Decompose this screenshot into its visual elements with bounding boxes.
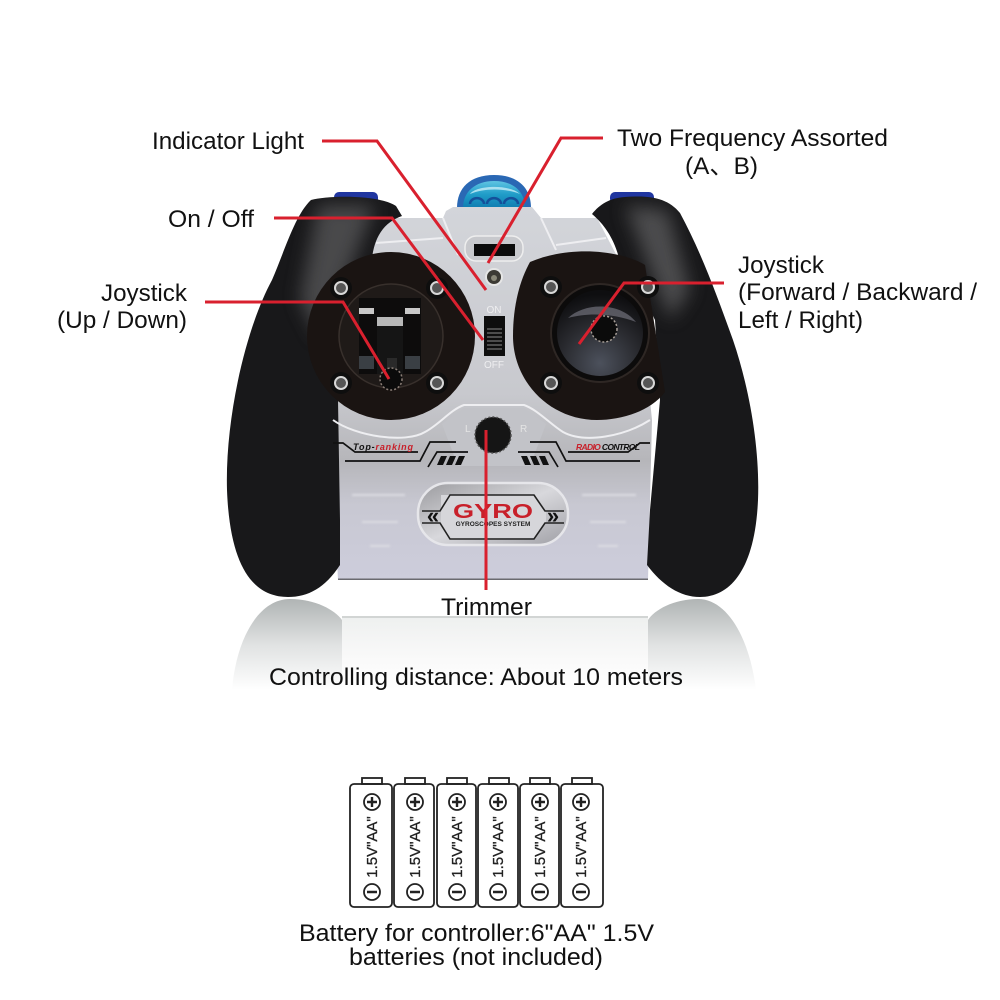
- battery 5: [520, 778, 559, 907]
- label: trimmer: Trimmer: [441, 594, 532, 621]
- left decal: [333, 442, 468, 467]
- battery 2: [394, 778, 434, 907]
- label: left/right: Left / Right): [738, 307, 863, 334]
- antenna light: [457, 175, 531, 208]
- silver panel highlights: [333, 218, 650, 470]
- caption: battery line 2: batteries (not included): [349, 944, 603, 971]
- battery 1: [350, 778, 392, 907]
- left decal: Top-ranking: [353, 442, 414, 452]
- joystick plate screws: [330, 276, 659, 394]
- trimmer panel: L: [465, 424, 471, 435]
- label: up/down: (Up / Down): [57, 307, 187, 334]
- label: indicator light: Indicator Light: [152, 128, 304, 155]
- GYRO badge: «: [427, 503, 439, 528]
- trimmer panel: R: [520, 424, 527, 435]
- left joystick knob: [380, 358, 402, 390]
- leader line: two frequency: [488, 138, 603, 263]
- power switch: [484, 305, 505, 371]
- battery 1: 1.5V"AA": [364, 816, 381, 878]
- indicator LED: [485, 268, 503, 286]
- battery 6: [561, 778, 603, 907]
- right joystick plate: [513, 251, 665, 420]
- trimmer panel: [442, 408, 546, 466]
- battery 2: 1.5V"AA": [407, 816, 424, 878]
- body grooves: [352, 495, 636, 546]
- GYRO badge: [418, 483, 568, 545]
- leader line: trimmer: [484, 430, 488, 590]
- battery 6: 1.5V"AA": [573, 816, 590, 878]
- label: on/off: On / Off: [168, 206, 254, 233]
- GYRO badge: GYRO: [453, 501, 533, 523]
- battery 4: [478, 778, 518, 907]
- remote controller: [220, 175, 765, 600]
- reflection under controller: [232, 599, 756, 690]
- left joystick plate: [307, 252, 475, 420]
- frequency selector: [465, 236, 523, 261]
- label: left joystick: Joystick: [101, 280, 188, 307]
- grip buttons: [334, 192, 654, 204]
- battery 5: 1.5V"AA": [532, 816, 549, 878]
- label: controlling distance: Controlling distance: About 10 meters: [269, 664, 683, 691]
- battery 3: 1.5V"AA": [449, 816, 466, 878]
- leader line: left joystick: [205, 302, 389, 379]
- label: A, B: (A、B): [685, 153, 758, 180]
- right grip: [585, 190, 765, 600]
- bottom edge: [338, 578, 648, 580]
- leader line: on/off: [274, 218, 483, 340]
- battery 4: 1.5V"AA": [490, 816, 507, 878]
- batteries: [350, 778, 603, 907]
- label: right joystick: Joystick: [738, 252, 825, 279]
- silver body: [330, 207, 652, 580]
- leader line: right joystick: [579, 283, 724, 344]
- battery 3: [437, 778, 476, 907]
- power switch: OFF: [484, 360, 504, 371]
- GYRO badge: GYROSCOPES SYSTEM: [456, 521, 530, 528]
- power switch: ON: [486, 305, 502, 316]
- leader line: indicator light: [322, 141, 486, 290]
- caption: battery line 1: Battery for controller:6"AA" 1.5V: [299, 920, 655, 947]
- label: two frequency assorted: Two Frequency Assorted: [617, 125, 888, 152]
- label: forward/backward: (Forward / Backward /: [738, 279, 977, 306]
- right decal: [518, 442, 650, 467]
- right decal: RADIO CONTROL: [576, 442, 640, 452]
- right joystick knob: [591, 316, 617, 342]
- left grip: [220, 190, 410, 600]
- GYRO badge: »: [547, 503, 559, 528]
